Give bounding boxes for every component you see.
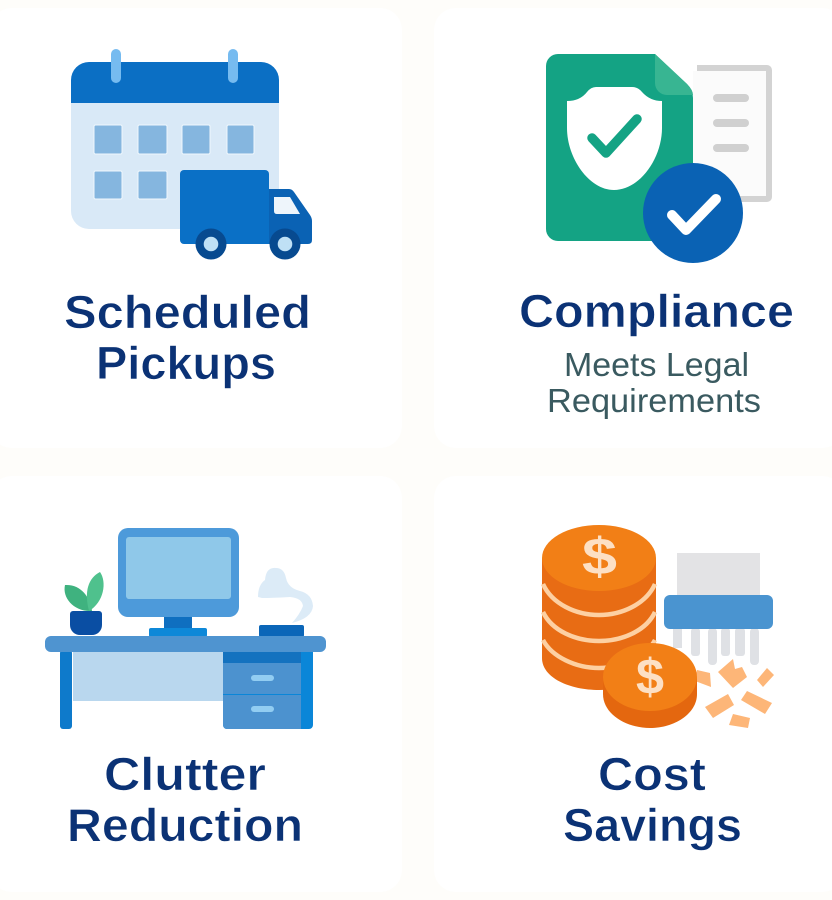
heading: scheduled pickups xyxy=(64,286,311,389)
heading: cost savings: Savings xyxy=(563,799,742,851)
heading: clutter reduction: Clutter xyxy=(104,748,266,800)
icon: paper shredder xyxy=(664,553,773,665)
heading: clutter reduction xyxy=(67,748,303,851)
icon: potted plant xyxy=(65,572,104,635)
icon: desk xyxy=(45,636,326,729)
small dollar sign: $ xyxy=(636,649,664,705)
panel: compliance xyxy=(519,54,794,419)
heading: cost savings: Cost xyxy=(598,748,706,800)
heading: cost savings xyxy=(563,748,742,851)
icon: delivery truck xyxy=(180,170,312,260)
subtitle: meets legal requirements: Meets Legal xyxy=(564,346,749,383)
heading: clutter reduction: Reduction xyxy=(67,799,303,851)
subtitle: meets legal requirements: Requirements xyxy=(547,382,761,419)
heading: scheduled pickups: Scheduled xyxy=(64,286,311,338)
panel: scheduled pickups xyxy=(64,49,312,389)
heading: compliance: Compliance xyxy=(519,285,794,337)
icon: lamp xyxy=(258,568,313,637)
panel: clutter reduction xyxy=(45,528,326,851)
panel: cost savings xyxy=(542,525,774,851)
icon: blue check badge xyxy=(643,163,743,263)
large dollar sign: $ xyxy=(582,528,617,586)
icon: back document xyxy=(690,65,772,202)
heading: scheduled pickups: Pickups xyxy=(96,337,276,389)
icon: single coin xyxy=(603,643,697,728)
icon: shredded paper pieces xyxy=(695,659,774,728)
icon: green document with shield xyxy=(546,54,693,241)
icon: calendar xyxy=(71,49,279,229)
subtitle: meets legal requirements xyxy=(547,346,761,419)
icon: coin stack xyxy=(542,525,656,690)
icon: computer monitor xyxy=(118,528,239,637)
